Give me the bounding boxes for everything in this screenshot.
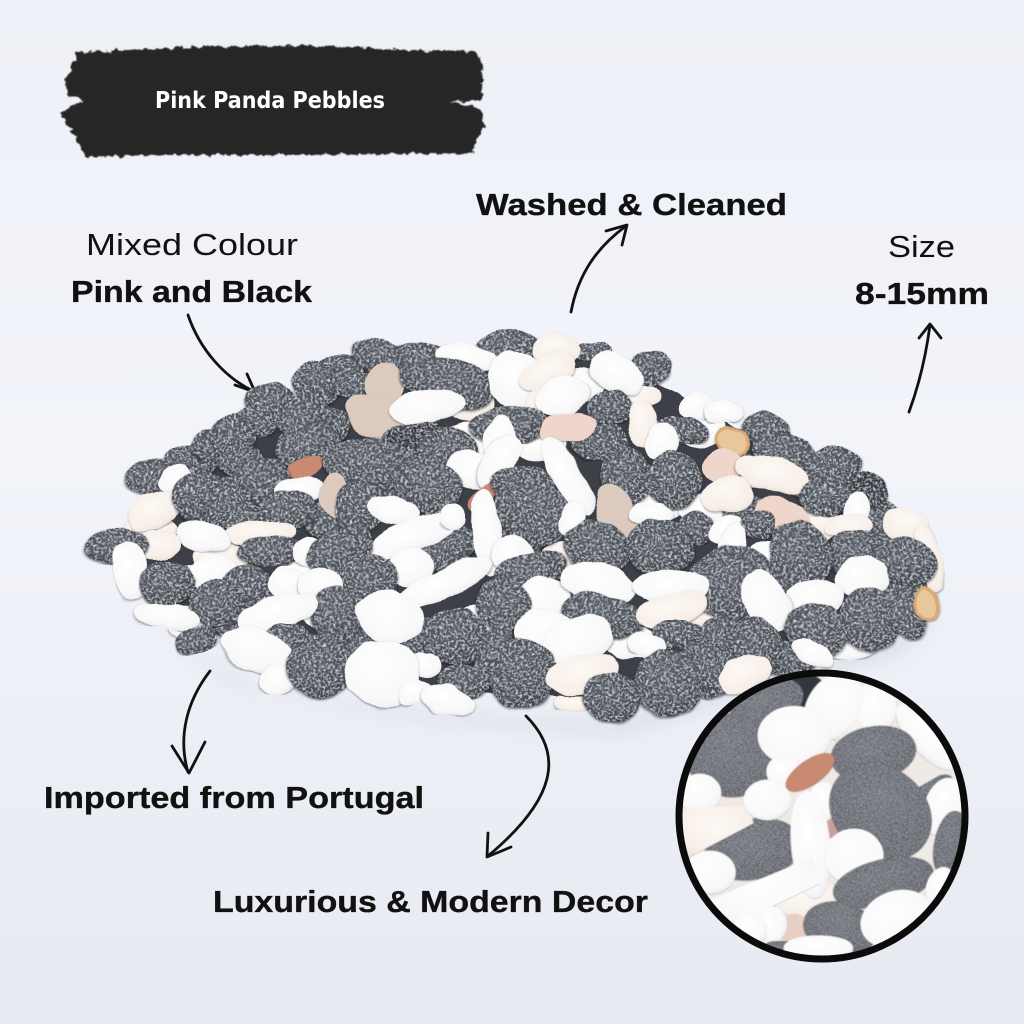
inset magnified detail	[670, 665, 970, 965]
label: size: 8-15mm	[855, 276, 989, 311]
pile shadow	[150, 615, 945, 735]
label: colour: Pink and Black	[71, 274, 313, 309]
label: imported: Imported from Portugal	[44, 780, 424, 815]
arrow: washed	[571, 225, 627, 312]
pebble pile	[88, 328, 946, 721]
title text: Pink Panda Pebbles	[155, 88, 385, 114]
label: colour: Mixed Colour	[86, 227, 298, 262]
label: colour	[71, 227, 313, 309]
arrow: colour	[188, 315, 255, 392]
label: size	[855, 229, 989, 311]
label: decor: Luxurious & Modern Decor	[213, 884, 648, 919]
arrow: imported	[172, 671, 210, 773]
arrow: size	[909, 324, 941, 412]
label: washed: Washed & Cleaned	[476, 187, 787, 222]
label: size: Size	[888, 229, 955, 264]
arrow: decor	[487, 716, 549, 857]
inset photo	[682, 676, 962, 956]
brush stroke	[60, 45, 484, 157]
title banner	[60, 45, 484, 157]
inset ring	[679, 673, 965, 959]
